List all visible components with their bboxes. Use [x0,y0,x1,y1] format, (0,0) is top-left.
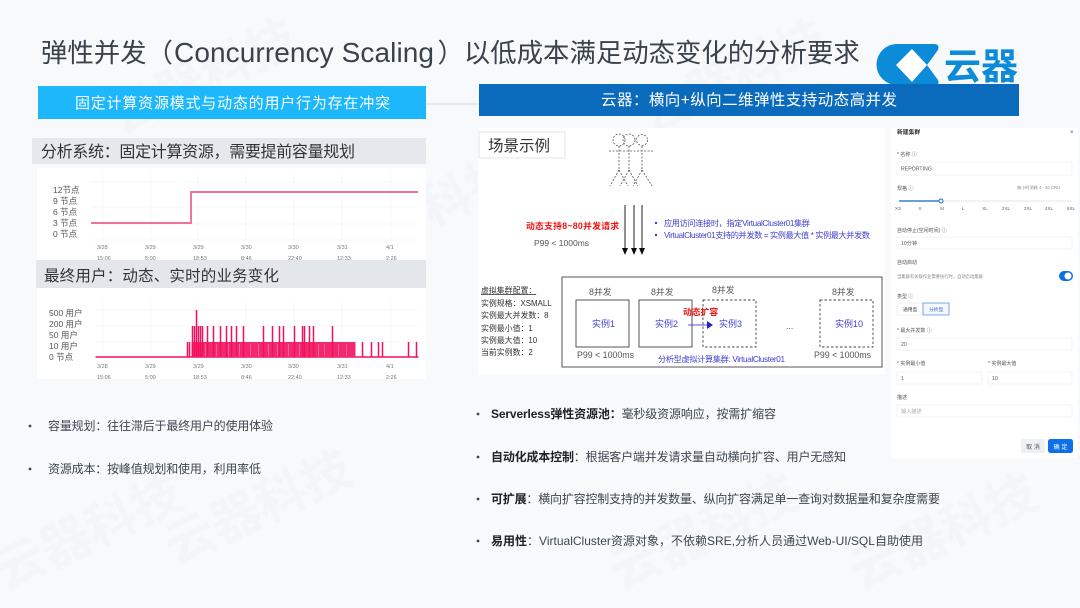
panel: analysis system chart [32,138,426,262]
title: ）以低成本满足动态变化的分析要求 [438,38,860,68]
chart heading: analysis system: 分析系统：固定计算资源，需要提前容量规划 [41,142,355,161]
panel: new cluster dialog: 类型 ⓘ [897,293,913,300]
panel: new cluster dialog: 每小时消耗 4 - 40 CRU [1017,184,1060,191]
instances [576,300,873,347]
panel: new cluster dialog: 自动停止(空闲时间) ⓘ [897,227,947,234]
time axis labels: 15:06 [97,375,111,381]
panel: new cluster dialog: * 实例最小值 [897,360,925,367]
panel: new cluster dialog [891,128,1078,458]
node axis labels: 3 节点 [53,218,78,228]
panel: new cluster dialog: 10分钟 [901,239,917,247]
size slider: XS [895,206,901,211]
scale out label: 动态扩容 [683,306,718,317]
time axis labels: 3/29 [193,364,204,370]
cluster config: 实例最小值：1 [481,323,533,333]
panel: new cluster dialog: 当集群有关联作业需要执行时，自动启动集群 [897,273,984,280]
scenario label: 场景示例 [488,137,550,155]
time axis labels [97,245,397,262]
size slider: S [918,206,922,211]
user axis labels: 50 用户 [49,330,78,340]
dialog buttons: 取 消 [1026,443,1040,451]
notes: blue bullets: 应用访问连接时，指定VirtualCluster01集群 [664,218,810,228]
cluster box: P99 < 1000ms [814,350,872,360]
chart heading: end users: 最终用户：动态、实时的业务变化 [44,267,279,285]
time axis labels: 2:26 [386,256,397,262]
time axis labels: 15:06 [97,256,111,262]
text: 云器科技 [631,10,836,145]
cluster box: 8并发 [589,286,612,297]
text: 云器科技 [101,10,306,145]
bullet: scalable: 可扩展：横向扩容控制支持的并发数量、纵向扩容满足单一查询对数据量和复杂度需要 [491,491,940,506]
panel: new cluster dialog: 20 [901,342,907,348]
scenario label [479,132,565,158]
p99 label: P99 < 1000ms [534,238,589,248]
time axis labels: 3/28 [97,245,108,251]
cluster box: 8并发 [712,284,735,295]
dialog buttons: 确 定 [1054,443,1067,451]
heading bar: right [479,84,1019,116]
node axis labels: 6 节点 [53,207,78,217]
bullet: auto cost control: 自动化成本控制：根据客户端并发请求量自动横向扩容、用户无感知 [491,449,846,464]
user axis labels: 200 用户 [49,319,83,329]
user axis labels: 10 用户 [49,341,78,351]
cluster box: 实例2 [655,318,678,329]
time axis labels: 3/30 [288,364,299,370]
notes: blue bullets: VirtualCluster01支持的并发数 = 实例最大值 * 实例最大并发数 [664,230,870,240]
panel: new cluster dialog: 输入描述 [901,407,922,415]
cluster config: 当前实例数：2 [481,347,533,357]
cluster box: 实例1 [592,318,615,329]
time axis labels: 3/28 [97,364,108,370]
time axis labels: 3/31 [337,245,348,251]
time axis labels: 2:26 [386,375,397,381]
size slider: 5XL [1067,206,1076,211]
cluster config: 实例最大值：10 [481,335,538,345]
bullet: capacity planning: 容量规划：往往滞后于最终用户的使用体验 [48,418,273,433]
cluster box: 分析型虚拟计算集群: VirtualCluster01 [658,354,785,364]
time axis labels: 5:00 [145,256,156,262]
cluster config: 实例规格：XSMALL [481,298,552,308]
cluster box: 8并发 [651,286,674,297]
cluster box: 8并发 [832,286,855,297]
panel: new cluster dialog: * 实例最大值 [988,360,1016,367]
cluster config: 虚拟集群配置： [481,285,536,295]
cluster config [481,285,552,357]
bullet: ease of use: 易用性：VirtualCluster资源对象，不依赖SRE,分析人员通过Web-UI/SQL自助使用 [491,533,923,548]
time axis labels: 4/1 [386,245,394,251]
size slider: XL [982,206,988,211]
callout: dynamic concurrency: 动态支持8~80并发请求 [526,220,619,231]
size slider: 4XL [1045,206,1054,211]
logo [876,44,1019,87]
time axis labels: 3/31 [337,364,348,370]
dialog buttons [1021,439,1073,453]
time axis labels: 22:40 [288,256,302,262]
node axis labels: 9 节点 [53,196,78,206]
time axis labels: 18:53 [193,256,207,262]
panel: new cluster dialog: 描述 [897,394,907,401]
time axis labels: 3/30 [288,245,299,251]
text: 云器科技 [841,465,1046,600]
text: 云器科技 [321,145,526,280]
user axis labels: 500 用户 [49,308,83,318]
user axis labels: 0 节点 [49,352,74,362]
chart heading: analysis system [32,138,426,164]
time axis labels: 3/30 [241,245,252,251]
time axis labels: 12:33 [337,256,351,262]
cluster box [562,277,882,367]
chart heading: end users [36,260,426,288]
time axis labels: 8:46 [241,256,252,262]
time axis labels: 4/1 [386,364,394,370]
size slider: M [940,206,944,211]
type selector: 分析型 [929,306,944,313]
panel: end user chart [36,260,426,381]
panel: new cluster dialog: 自动启动 [897,259,917,266]
notes: blue bullets [655,218,870,240]
panel: scenario diagram [478,128,885,375]
size slider [895,199,1076,211]
icon: dashed users [609,134,653,186]
cluster box: ... [786,321,793,331]
panel: new cluster dialog: 规格 ⓘ [897,185,913,192]
panel: new cluster dialog: 新建集群 [897,128,920,136]
time axis labels: 8:46 [241,375,252,381]
time axis labels [97,364,397,381]
heading bar: left: 固定计算资源模式与动态的用户行为存在冲突 [75,94,390,112]
heading bar: right: 云器：横向+纵向二维弹性支持动态高并发 [601,91,897,109]
arrows: requests [622,205,645,255]
time axis labels: 18:53 [193,375,207,381]
text: 云器科技 [156,440,361,575]
user axis labels [49,308,83,362]
text block: left bullets [29,418,273,476]
cluster box: 实例3 [719,318,742,329]
cluster box: 实例10 [835,318,863,329]
heading bar: left [38,86,426,119]
text: 云器科技 [621,195,826,330]
bullet: serverless: Serverless弹性资源池：毫秒级资源响应，按需扩缩容 [491,406,776,421]
cluster box: P99 < 1000ms [577,350,635,360]
text: 云器科技 [601,465,806,600]
time axis labels: 12:33 [337,375,351,381]
size slider: 3XL [1024,206,1033,211]
time axis labels: 3/29 [193,245,204,251]
title: Concurrency Scaling [174,37,434,68]
time axis labels: 5:00 [145,375,156,381]
node axis labels [53,185,80,239]
time axis labels: 3/29 [145,245,156,251]
size slider: 2XL [1002,206,1011,211]
logo: 云器 [944,46,1019,87]
panel: new cluster dialog: REPORTING [901,166,932,172]
type selector: 通用型 [903,306,918,313]
panel: new cluster dialog: * 最大并发数 ⓘ [897,327,932,334]
panel: new cluster dialog: × [1070,130,1074,136]
cluster config: 实例最大并发数：8 [481,310,549,320]
bullet: resource cost: 资源成本：按峰值规划和使用，利用率低 [48,461,261,476]
panel: new cluster dialog: 1 [901,376,904,382]
time axis labels: 22:40 [288,375,302,381]
panel: new cluster dialog: * 名称 ⓘ [897,151,917,158]
title: 弹性并发（ [41,38,173,68]
form inputs [897,162,1072,417]
node axis labels: 12节点 [53,185,80,195]
node axis labels: 0 节点 [53,229,78,239]
step line [91,192,418,223]
size slider: L [962,206,965,211]
time axis labels: 3/30 [241,364,252,370]
arrow: scale out [688,321,713,329]
text block: right bullets [477,406,940,548]
time axis labels: 3/29 [145,364,156,370]
type selector [897,303,949,315]
spike series [96,310,418,357]
toggle [1059,271,1073,281]
panel: new cluster dialog: 10 [992,376,998,382]
title [41,37,860,68]
